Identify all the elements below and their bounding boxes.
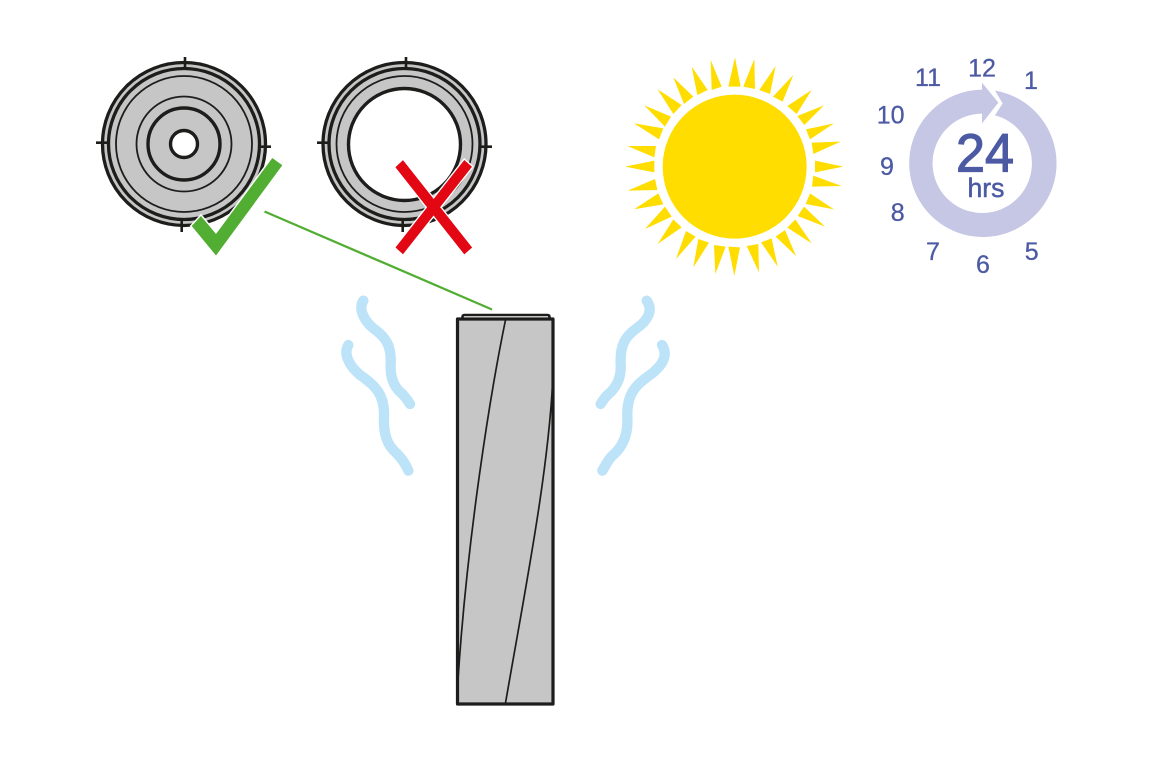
icon: incorrect log cross-section with large hollow centre — [317, 57, 492, 232]
clock hour numbers: 1 — [1024, 67, 1038, 95]
clock hour numbers: 7 — [926, 238, 940, 266]
circular arrow — [909, 83, 1057, 237]
clock hour numbers: 10 — [877, 102, 905, 130]
sun rays — [625, 57, 843, 276]
clock hour numbers: 9 — [880, 153, 894, 181]
clock hour numbers: 8 — [891, 199, 905, 227]
log grain lines — [458, 320, 553, 703]
hrs label: hrs — [968, 173, 1004, 203]
connector line from check mark to log — [264, 212, 492, 310]
clock hour numbers: 11 — [915, 64, 941, 92]
steam: left and right wavy lines — [346, 301, 665, 471]
clock hour numbers — [877, 55, 1039, 279]
24 label: 24 — [956, 124, 1014, 184]
log body — [458, 319, 553, 704]
clock hour numbers: 6 — [976, 251, 990, 279]
icon: green check mark — [192, 158, 282, 256]
clock hour numbers: 5 — [1025, 238, 1039, 266]
icon: sun — [625, 57, 843, 276]
sun disc — [663, 95, 807, 239]
icon: red cross mark — [396, 160, 472, 254]
icon: correct log cross-section with small centre hole — [96, 57, 271, 232]
log top cap — [462, 315, 550, 319]
log: side view — [458, 315, 553, 704]
clock hour numbers: 12 — [968, 55, 996, 83]
clock: 24 hours — [877, 55, 1057, 279]
